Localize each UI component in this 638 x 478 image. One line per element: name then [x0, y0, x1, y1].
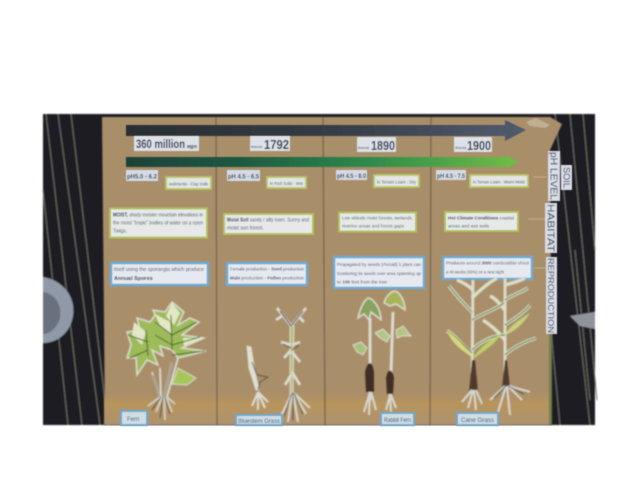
habitat box column 3: [339, 212, 416, 232]
soil box column 2: in Rich Soils - Wet: [270, 181, 304, 187]
reproduction box column 3: Propagated by seeds (rhizoid) 1 plant can: [337, 262, 421, 267]
soil box column 4: in Terrain Loam - Warm Moist: [473, 180, 526, 186]
reproduction box column 3: [334, 257, 424, 288]
photo background: dark striped fabric: [43, 114, 597, 425]
date label: 1890: 1890: [371, 138, 395, 153]
habitat box column 4: Hot Climate Conditions coastal: [448, 216, 514, 222]
reproduction box column 2: Male production - Pollen production: [230, 276, 304, 280]
date label: 1890: [357, 137, 396, 153]
name label: Cane Grass: Cane Grass: [461, 417, 495, 424]
reproduction box column 4: [443, 257, 532, 279]
connector ticks to side labels: [528, 177, 546, 268]
habitat box column 2: Moist Soil sandy / silty loam. Sunny and: [227, 218, 309, 224]
date label: 1890: Around: [358, 145, 369, 150]
soil box column 3: [374, 175, 419, 187]
habitat box column 2: moist sun forest.: [227, 226, 264, 232]
name label: Fern: Fern: [127, 417, 139, 423]
torn corner of board: [526, 118, 550, 128]
pH label column 3: [336, 170, 367, 180]
name label: Fern: [121, 411, 147, 425]
plant: rabbit fern: [353, 291, 411, 415]
name label: Bluestem Grass: [236, 415, 282, 425]
decorative object at left edge: [43, 277, 73, 343]
date label: 360 million ago: 360 million: [136, 139, 185, 151]
pH label column 1: [126, 170, 158, 181]
soil box column 1: [166, 177, 211, 189]
reproduction box column 2: [227, 263, 307, 285]
habitat box column 4: [445, 212, 518, 231]
reproduction box column 3: to 100 feet from the tree: [337, 280, 387, 284]
name label: Cane Grass: [457, 413, 498, 425]
name label: Rabbit Fern: [381, 413, 414, 425]
reproduction box column 4: a 48 weeks (60%) on a new night: [446, 270, 505, 276]
soil box column 3: in Terrain Loam - Dry: [377, 180, 417, 186]
name label: Bluestem Grass: Bluestem Grass: [238, 419, 280, 425]
reproduction box column 2: Female production - Seed production: [230, 266, 304, 272]
pH label column 4: pH 4.5 - 7.5: [437, 173, 465, 180]
date label: 1900: [454, 137, 492, 153]
cardboard display board: [102, 117, 562, 425]
soil box column 1: sediments - Clay Soils: [169, 182, 208, 188]
habitat box column 3: riverine areas and forest gaps: [342, 224, 405, 230]
habitat box column 2: [224, 214, 313, 234]
habitat box column 1: MOIST, shady moister mountain elevations in: [113, 212, 203, 218]
plant: cane grass: [447, 278, 536, 415]
date label: 1792: 1792: [264, 137, 289, 152]
soil box column 2: [267, 177, 306, 188]
habitat box column 4: areas and wet soils: [448, 224, 490, 230]
date label: 1792: [250, 136, 290, 152]
timeline arrow: [126, 120, 526, 141]
pH label column 2: [227, 170, 260, 181]
pH label column 1: pH5.0 - 6.2: [127, 174, 157, 180]
habitat box column 3: Low altitude moist forests, wetlands,: [342, 216, 413, 222]
pH label column 4: [436, 170, 466, 180]
date label: 1900: Around: [455, 145, 466, 150]
side label: habitat: HABITAT: [544, 204, 556, 252]
reproduction box column 1: itself using the sporangia which produce: [114, 267, 204, 273]
decorative smudge at right edge: [570, 312, 595, 329]
habitat box column 1: the moist "tropic" bodies of water on a open: [113, 220, 203, 226]
date label: 360 million ago: ago: [187, 144, 197, 150]
reproduction box column 1: [111, 263, 208, 285]
plant: bluestem grass: [247, 308, 310, 422]
habitat box column 1: Twigs.: [113, 228, 127, 234]
soil box column 4: [470, 175, 528, 187]
side label: soil: SOIL: [562, 167, 572, 188]
reproduction box column 4: Produces around 3000 combustible shoot: [446, 260, 530, 266]
date label: 1900: 1900: [467, 138, 491, 153]
date label: 1792: Around: [251, 144, 262, 149]
habitat box column 1: [110, 208, 207, 238]
reproduction box column 1: Annual Spores: [114, 276, 153, 282]
pH label column 2: pH 4.5 - 6.5: [228, 174, 259, 180]
progress arrow: [126, 155, 518, 169]
name label: Rabbit Fern: Rabbit Fern: [384, 418, 411, 424]
side label: reproduction: REPRODUCTION: [546, 258, 556, 333]
side label: pH level: pH LEVEL: [548, 152, 558, 200]
plant: fern: [127, 302, 206, 420]
reproduction box column 3: Scattering its seeds over area spanning up: [337, 271, 421, 276]
pH label column 3: pH 4.5 - 8.0: [337, 173, 366, 180]
